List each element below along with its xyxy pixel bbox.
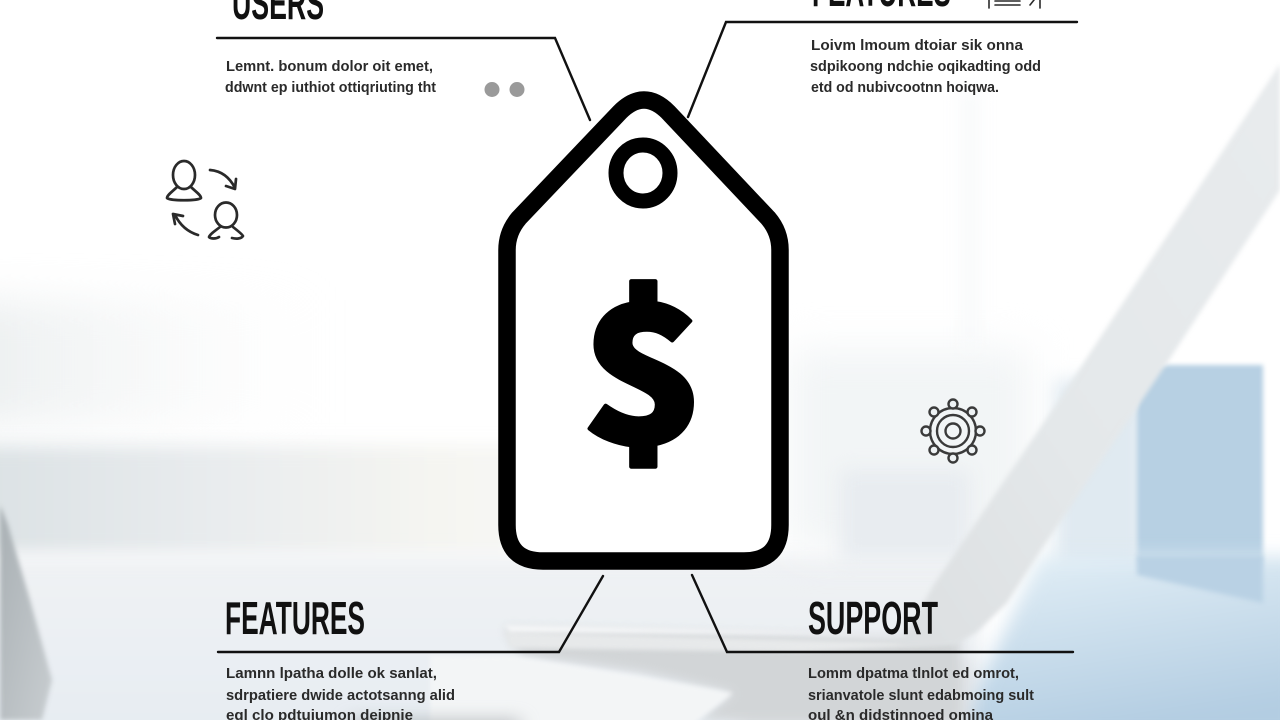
- icon: two grey dots: [484, 82, 524, 97]
- text block: features top: sdpikoong ndchie oqikadting odd: [810, 59, 1041, 75]
- text block: users: ddwnt ep iuthiot ottiqriuting tht: [225, 80, 436, 96]
- text block: support: [808, 666, 1034, 720]
- connector line: features top: [688, 22, 1077, 117]
- connector line: features bottom: [218, 576, 603, 652]
- panel: users: [167, 0, 590, 239]
- panel: support: [692, 575, 1073, 720]
- text block: features top: [810, 38, 1041, 96]
- icon: price tag: [507, 100, 780, 561]
- panel: features top: [688, 0, 1077, 117]
- text block: users: Lemnt. bonum dolor oit emet,: [226, 59, 433, 75]
- icon: document cut off: [989, 0, 1040, 8]
- panel: features bottom: [218, 576, 603, 720]
- icon: gear: [922, 400, 984, 462]
- text block: features bottom: Lamnn lpatha dolle ok sanlat,: [226, 666, 437, 682]
- text block: features top: Loivm lmoum dtoiar sik onna: [811, 38, 1024, 54]
- text block: support: Lomm dpatma tlnlot ed omrot,: [808, 666, 1019, 682]
- text block: features bottom: sdrpatiere dwide actotsanng alid: [226, 688, 455, 704]
- text block: features top: etd od nubivcootnn hoiqwa.: [811, 80, 999, 96]
- connector line: support: [692, 575, 1073, 652]
- connector line: users: [217, 38, 590, 120]
- heading: support: SUPPORT: [808, 592, 938, 644]
- text block: users: [225, 59, 436, 96]
- dollar sign: $: [581, 223, 706, 498]
- heading: features bottom: FEATURES: [225, 592, 365, 644]
- tag hole: [616, 145, 670, 201]
- text block: support: srianvatole slunt edabmoing sult: [808, 688, 1034, 704]
- icon: users exchange: [167, 161, 243, 239]
- text block: features bottom: [226, 666, 455, 720]
- tag outline: [507, 100, 780, 561]
